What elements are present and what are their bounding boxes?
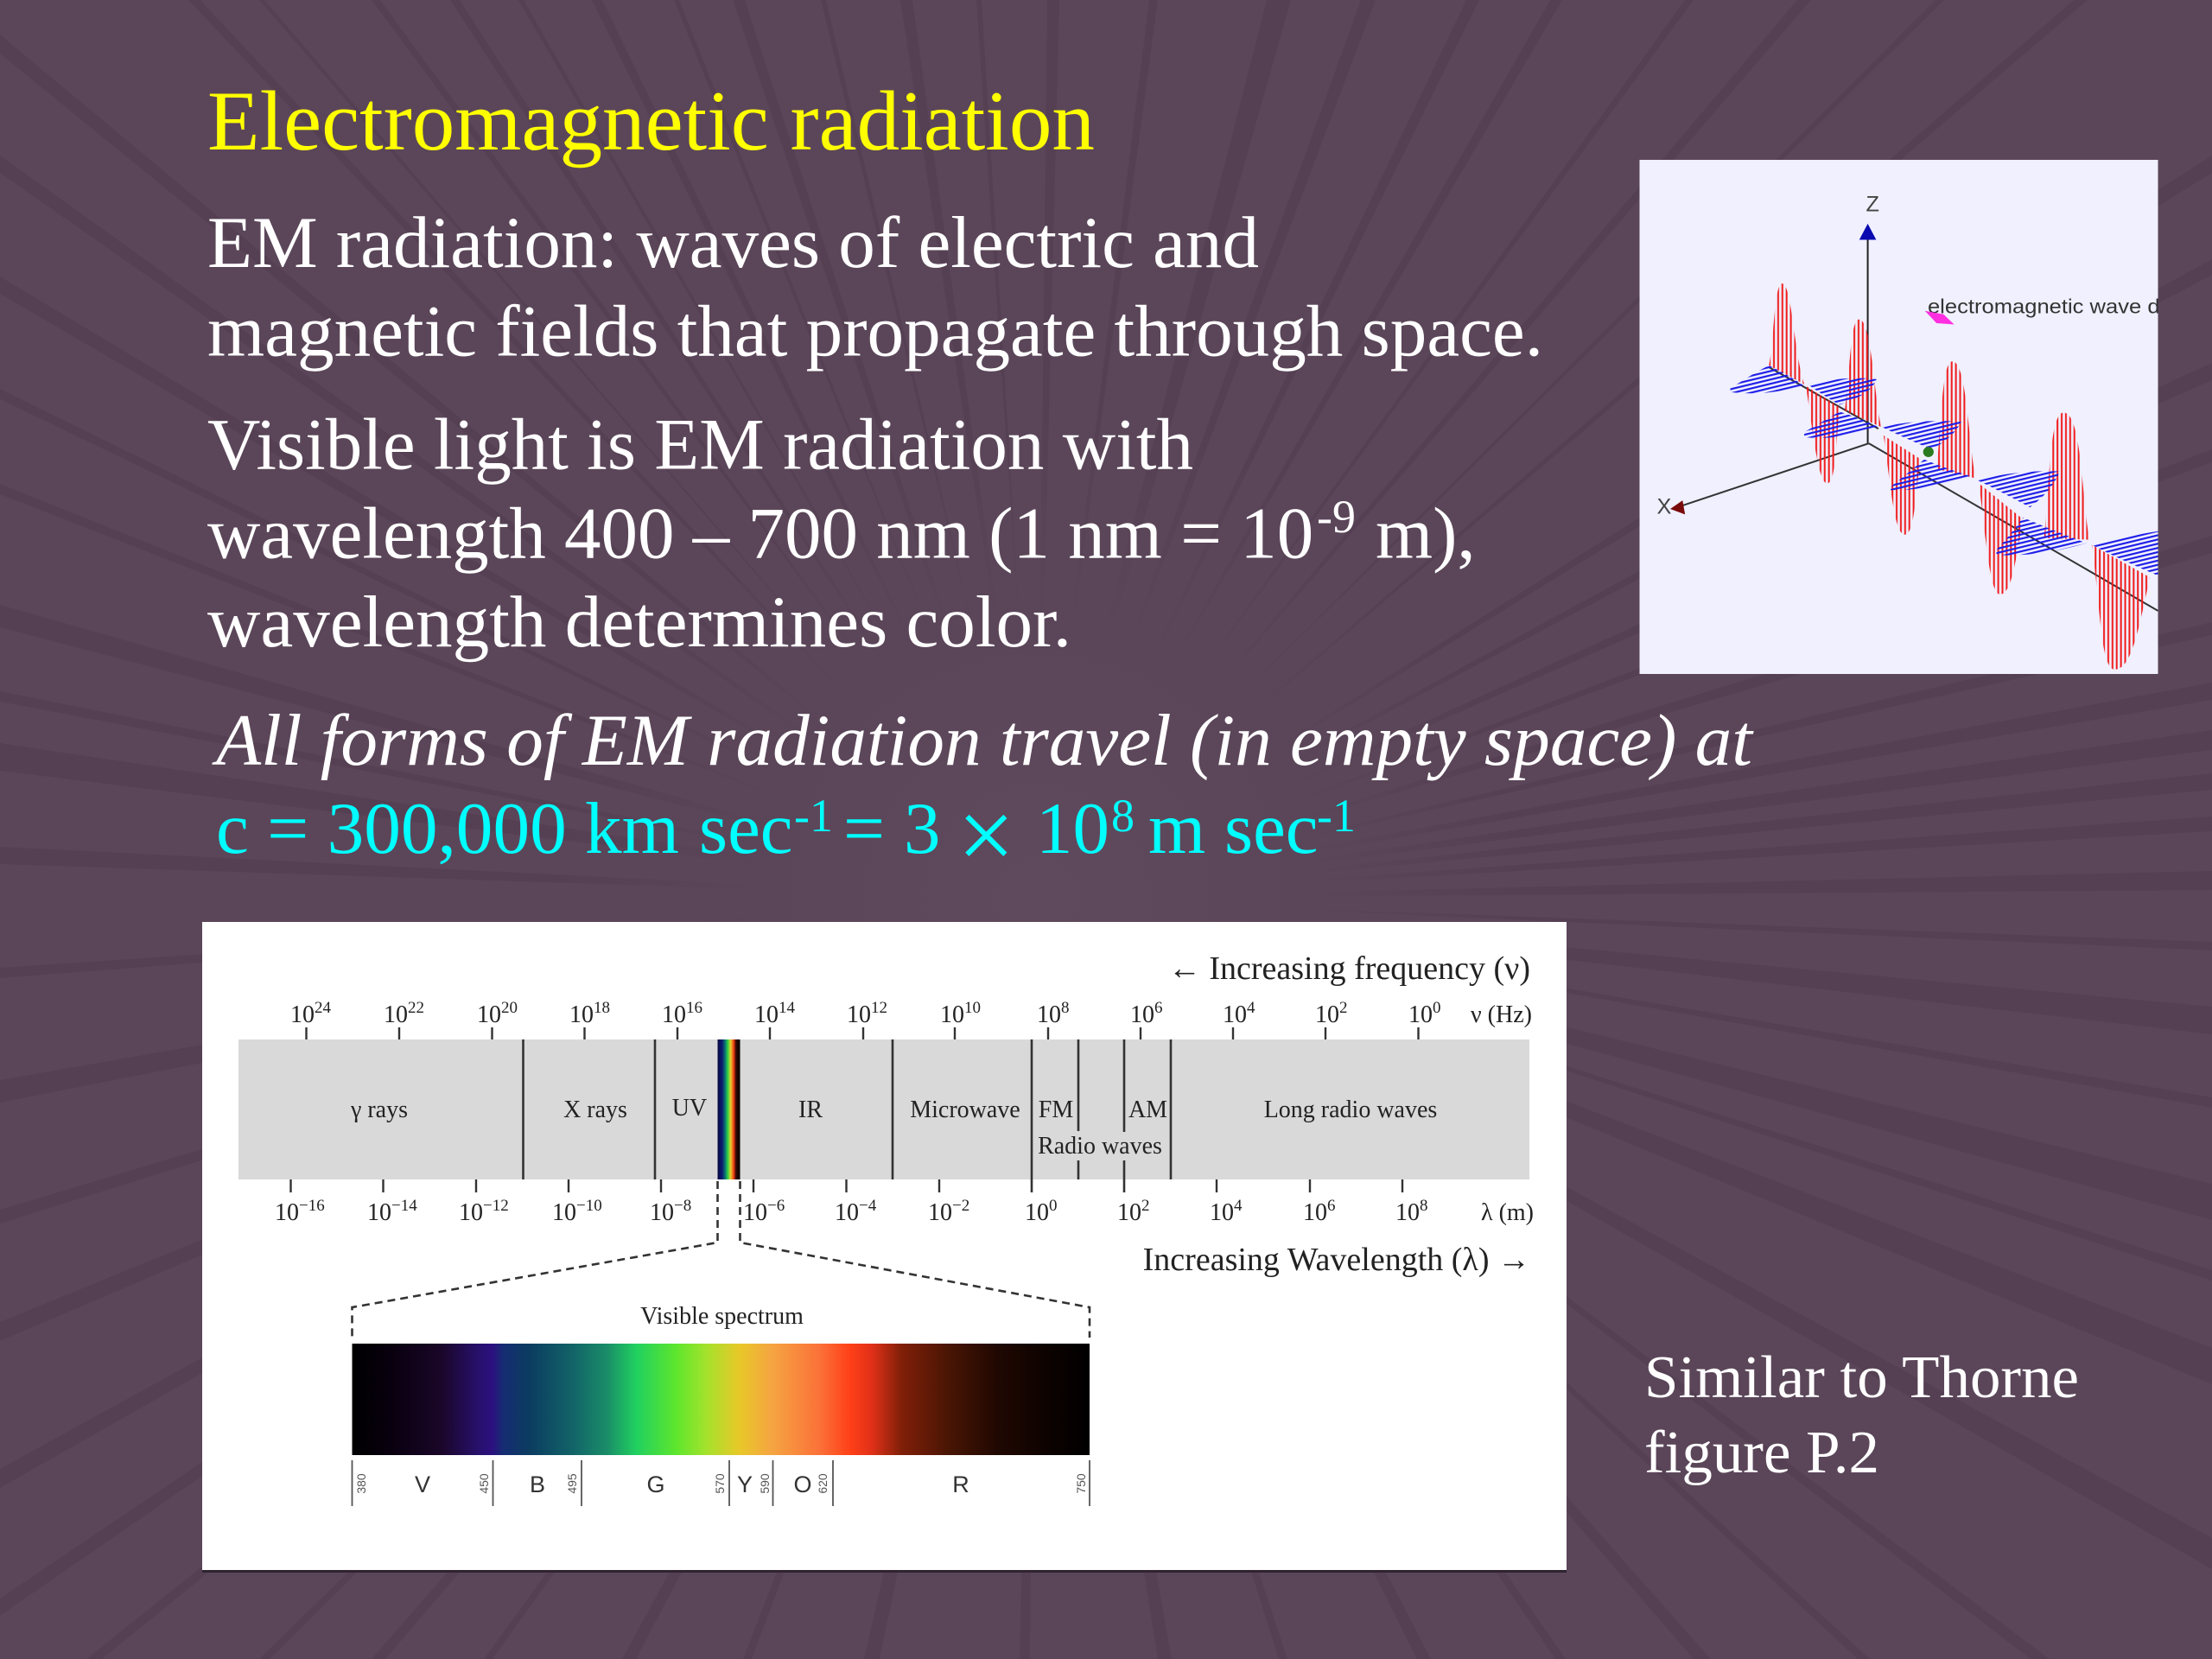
frequency axis: 10: [940, 1001, 964, 1028]
visible spectrum scale: B: [530, 1471, 545, 1497]
frequency axis: 24: [315, 999, 332, 1017]
visible spectrum scale: 570: [713, 1473, 727, 1494]
frequency axis: 4: [1247, 999, 1255, 1017]
wavelength axis: 0: [1049, 1197, 1058, 1215]
wavelength axis: 6: [1327, 1197, 1336, 1215]
visible spectrum scale: G: [646, 1471, 665, 1497]
spectrum band: AM: [1128, 1096, 1167, 1123]
frequency axis: 10: [1037, 1001, 1061, 1028]
frequency axis: 14: [779, 999, 795, 1017]
frequency axis: 10: [1408, 1001, 1433, 1028]
frequency axis: 10: [1223, 1001, 1247, 1028]
frequency axis: 10: [847, 1001, 871, 1028]
text block: EM radiation definition: EM radiation: waves of electric and: [207, 202, 1259, 283]
wavelength axis: −6: [767, 1197, 785, 1215]
visible spectrum scale: 450: [477, 1473, 491, 1494]
text: speed of light equation: c = 300,000 km: [216, 788, 679, 869]
wavelength axis: 2: [1141, 1197, 1149, 1215]
text block: visible light: m),: [1376, 493, 1476, 574]
wavelength axis: 10: [367, 1199, 391, 1226]
text: speed of light equation: ×: [957, 779, 1015, 892]
text: speed of light equation: m: [1148, 788, 1205, 869]
frequency axis: 18: [594, 999, 610, 1017]
frequency axis: 10: [964, 999, 981, 1017]
frequency axis: 0: [1433, 999, 1441, 1017]
frequency axis: 10: [290, 1001, 315, 1028]
wavelength axis: 10: [459, 1199, 483, 1226]
frequency axis: 10: [569, 1001, 594, 1028]
wavelength axis: 10: [1117, 1199, 1141, 1226]
dashed zoom lines: [353, 1181, 1090, 1338]
frequency axis: 20: [501, 999, 518, 1017]
text: speed of light equation: 10: [1036, 788, 1109, 869]
z axis: [1859, 193, 1879, 443]
caption: figure P.2: [1644, 1420, 1879, 1486]
propagation axis: [1769, 367, 2158, 611]
visible spectrum scale: 380: [354, 1473, 368, 1494]
visible spectrum scale: 590: [758, 1473, 772, 1494]
wavelength axis: 8: [1420, 1197, 1427, 1215]
spectrum band: [238, 1039, 1529, 1192]
frequency heading: ← Increasing frequency (ν): [1168, 950, 1530, 987]
wave origin marker: [1923, 447, 1934, 457]
visible spectrum scale: 495: [565, 1473, 579, 1494]
frequency axis: 10: [1130, 1001, 1154, 1028]
panel: 3D wave diagram: [1640, 160, 2212, 674]
title: Electromagnetic radiation: [207, 74, 1095, 168]
wavelength axis: 10: [743, 1199, 767, 1226]
wavelength axis: 10: [275, 1199, 299, 1226]
frequency axis: 22: [408, 999, 424, 1017]
text block: visible light: wavelength determines color.: [207, 582, 1071, 663]
spectrum band: X rays: [563, 1096, 627, 1123]
text block: visible light: [207, 404, 1476, 663]
frequency axis: 10: [754, 1001, 779, 1028]
caption: Similar to Thorne: [1644, 1344, 2079, 1411]
visible spectrum scale: [353, 1460, 1090, 1506]
wavelength axis: λ (m): [1481, 1199, 1534, 1226]
frequency axis: 10: [384, 1001, 408, 1028]
text: speed of light equation: 8: [1111, 790, 1135, 842]
wavelength axis: 10: [1025, 1199, 1049, 1226]
visible spectrum scale: V: [415, 1471, 430, 1497]
wavelength axis: 10: [928, 1199, 952, 1226]
wavelength axis: −8: [674, 1197, 691, 1215]
text: speed of light equation: -1: [794, 790, 833, 842]
spectrum band: γ rays: [350, 1096, 408, 1123]
frequency axis: 10: [662, 1001, 686, 1028]
text block: visible light: -9: [1317, 491, 1356, 543]
text: speed of EM radiation, italic: All forms of EM radiation travel (in empty space) at: [212, 700, 1754, 781]
panel: electromagnetic spectrum chart: [202, 922, 1567, 1573]
spectrum band: Radio waves: [1038, 1133, 1162, 1160]
x axis: X: [1656, 495, 1672, 518]
frequency axis: 10: [1315, 1001, 1339, 1028]
frequency axis: [290, 999, 1532, 1039]
frequency axis: 6: [1154, 999, 1163, 1017]
visible spectrum scale: R: [952, 1471, 969, 1497]
direction arrow: [1925, 311, 1955, 325]
wavelength axis: −12: [483, 1197, 509, 1215]
visible spectrum scale: O: [793, 1471, 812, 1497]
z axis: Z: [1866, 193, 1879, 216]
visible spectrum scale: 750: [1074, 1473, 1088, 1494]
text: speed of light equation: =: [843, 788, 885, 869]
visible spectrum scale: Y: [737, 1471, 753, 1497]
spectrum band: Microwave: [910, 1096, 1020, 1123]
spectrum band: Long radio waves: [1264, 1096, 1437, 1123]
wavelength axis: −2: [952, 1197, 969, 1215]
text block: EM radiation definition: magnetic fields that propagate through space.: [207, 290, 1543, 372]
text block: EM radiation definition: [207, 202, 1543, 372]
text block: visible light: wavelength 400 – 700 nm (1 nm = 10: [207, 493, 1313, 574]
wavelength axis: −10: [576, 1197, 602, 1215]
wavelength axis: −4: [859, 1197, 877, 1215]
frequency axis: 8: [1061, 999, 1070, 1017]
visible spectrum gradient: [353, 1344, 1090, 1455]
spectrum band: UV: [672, 1095, 707, 1122]
frequency axis: 12: [871, 999, 887, 1017]
wavelength heading: Increasing Wavelength (λ) →: [1143, 1242, 1530, 1278]
direction label: electromagnetic wave direction: [1928, 296, 2212, 317]
wavelength axis: 10: [552, 1199, 576, 1226]
wavelength axis: −16: [299, 1197, 325, 1215]
wavelength axis: 10: [1303, 1199, 1327, 1226]
visible spectrum heading: Visible spectrum: [640, 1303, 804, 1330]
magnetic field wave: [1730, 365, 2158, 575]
x axis: [1657, 443, 1869, 518]
wavelength axis: [275, 1179, 1534, 1226]
wavelength axis: 10: [1210, 1199, 1234, 1226]
text: speed of light equation: sec: [1224, 788, 1319, 869]
frequency axis: 2: [1339, 999, 1348, 1017]
wavelength axis: −14: [391, 1197, 417, 1215]
text: speed of light equation: 3: [904, 788, 940, 869]
visible spectrum scale: 620: [816, 1473, 830, 1494]
wavelength axis: 10: [650, 1199, 674, 1226]
wavelength axis: 10: [835, 1199, 859, 1226]
caption: [1644, 1344, 2079, 1486]
electric field wave: [1769, 283, 2150, 670]
frequency axis: ν (Hz): [1471, 1001, 1532, 1028]
wavelength axis: 4: [1234, 1197, 1243, 1215]
frequency axis: 16: [686, 999, 702, 1017]
spectrum band: IR: [798, 1096, 823, 1123]
frequency axis: 10: [477, 1001, 501, 1028]
spectrum band: FM: [1039, 1096, 1073, 1123]
text: speed of light equation: sec: [699, 788, 793, 869]
text: speed of light equation: [216, 779, 1356, 892]
text block: visible light: Visible light is EM radiation with: [207, 404, 1193, 486]
text: speed of light equation: -1: [1317, 790, 1356, 842]
wavelength axis: 10: [1395, 1199, 1420, 1226]
